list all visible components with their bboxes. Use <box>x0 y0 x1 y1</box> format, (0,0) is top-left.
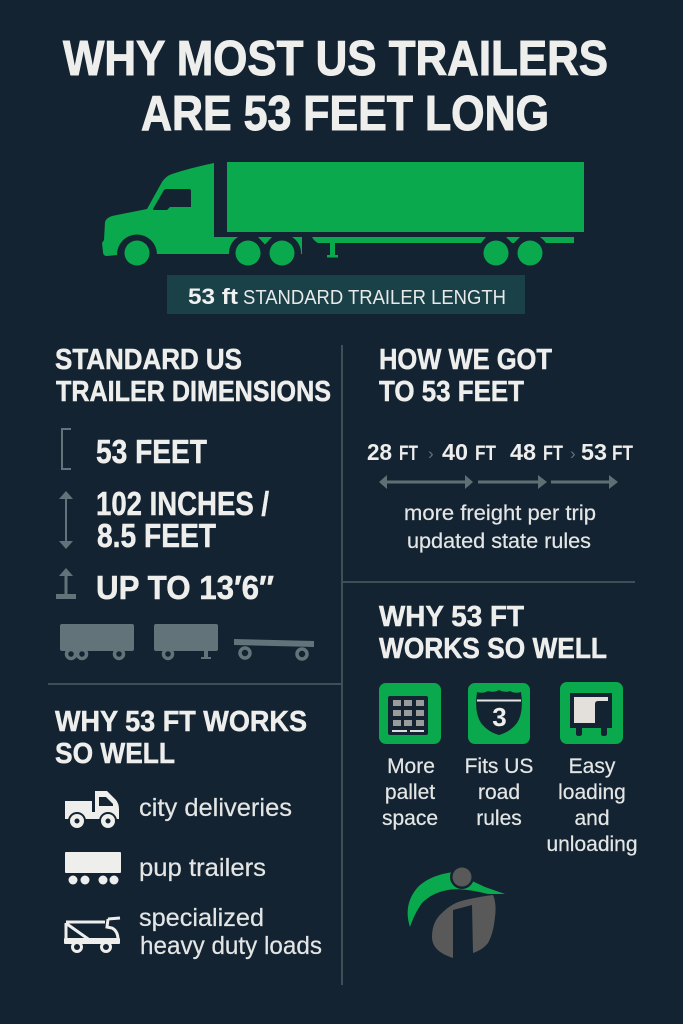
title: WHY MOST US TRAILERS <box>63 32 608 86</box>
timeline arrows <box>379 475 618 489</box>
length label: STANDARD TRAILER LENGTH <box>243 286 506 309</box>
text: specialized heavy duty loads: heavy duty loads <box>140 932 322 960</box>
horizontal divider right <box>343 581 635 583</box>
timeline notes: updated state rules <box>407 530 591 553</box>
horizontal divider left <box>48 683 342 685</box>
timeline labels: 28 <box>367 439 392 465</box>
text: more pallet space: space <box>382 807 438 830</box>
timeline notes <box>404 502 596 553</box>
heading: how we got to 53 feet: TO 53 FEET <box>379 376 524 408</box>
text: fits US road rules: road <box>478 781 520 804</box>
vertical divider <box>341 345 343 985</box>
heading: standard dimensions: TRAILER DIMENSIONS <box>56 376 331 408</box>
timeline labels: 40 <box>442 439 468 465</box>
heading: how we got to 53 feet <box>379 344 552 408</box>
heading: standard dimensions: STANDARD US <box>55 344 242 376</box>
text: more pallet space <box>382 755 438 830</box>
text: specialized heavy duty loads <box>139 904 322 960</box>
timeline labels <box>367 439 633 465</box>
heading: why 53 ft right: WORKS SO WELL <box>379 633 607 665</box>
heading: why 53 ft left: SO WELL <box>55 738 175 770</box>
text: easy loading and unloading: and <box>574 807 610 830</box>
timeline labels: FT <box>612 442 633 465</box>
text: fits US road rules <box>465 755 533 830</box>
dimension: width: 8.5 FEET <box>97 517 216 554</box>
title <box>63 32 608 141</box>
length label: 53 ft <box>188 284 239 309</box>
timeline notes: more freight per trip <box>404 502 596 525</box>
text: fits US road rules: Fits US <box>465 755 533 778</box>
text: more pallet space: More <box>387 755 435 778</box>
text: easy loading and unloading: loading <box>558 781 626 804</box>
title: ARE 53 FEET LONG <box>141 87 549 141</box>
text: easy loading and unloading: unloading <box>546 833 638 856</box>
icon: heavy duty truck <box>64 918 120 952</box>
timeline labels: FT <box>399 442 418 465</box>
icon: pallet space <box>379 683 441 744</box>
timeline labels: 48 <box>510 439 536 465</box>
heading: how we got to 53 feet: HOW WE GOT <box>379 344 552 376</box>
timeline labels: FT <box>543 442 563 465</box>
length label <box>167 275 525 314</box>
text: fits US road rules: rules <box>476 807 522 830</box>
text: specialized heavy duty loads: specialized <box>139 904 264 932</box>
icon: interstate shield <box>468 683 530 744</box>
dimension: height: UP TO 13′6″ <box>96 569 274 606</box>
dimension: width <box>59 485 269 554</box>
text: easy loading and unloading <box>546 755 638 856</box>
timeline labels: 53 <box>581 439 607 465</box>
heading: standard dimensions <box>55 344 331 408</box>
heading: why 53 ft right: WHY 53 FT <box>379 601 524 633</box>
timeline labels: FT <box>475 442 496 465</box>
dimension: width: 102 INCHES / <box>96 485 269 522</box>
heading: why 53 ft right <box>379 601 607 665</box>
icon: delivery truck <box>65 791 119 830</box>
dimension: length <box>62 429 207 470</box>
text: pup trailers: pup trailers <box>139 854 266 882</box>
icon: interstate shield: 3 <box>492 702 507 732</box>
icon: pup trailer <box>65 852 121 884</box>
text: more pallet space: pallet <box>385 781 435 804</box>
trailer type icons <box>60 624 314 659</box>
heading: why 53 ft left: WHY 53 FT WORKS <box>55 706 307 738</box>
dimension: length: 53 FEET <box>96 433 207 470</box>
timeline labels: › <box>570 444 576 463</box>
heading: why 53 ft left <box>55 706 307 770</box>
icon: easy loading <box>560 682 623 744</box>
timeline labels: › <box>428 444 434 463</box>
logo <box>408 865 505 958</box>
text: city deliveries: city deliveries <box>139 794 292 822</box>
text: easy loading and unloading: Easy <box>569 755 616 778</box>
cab window <box>153 189 191 210</box>
truck illustration <box>102 162 584 266</box>
